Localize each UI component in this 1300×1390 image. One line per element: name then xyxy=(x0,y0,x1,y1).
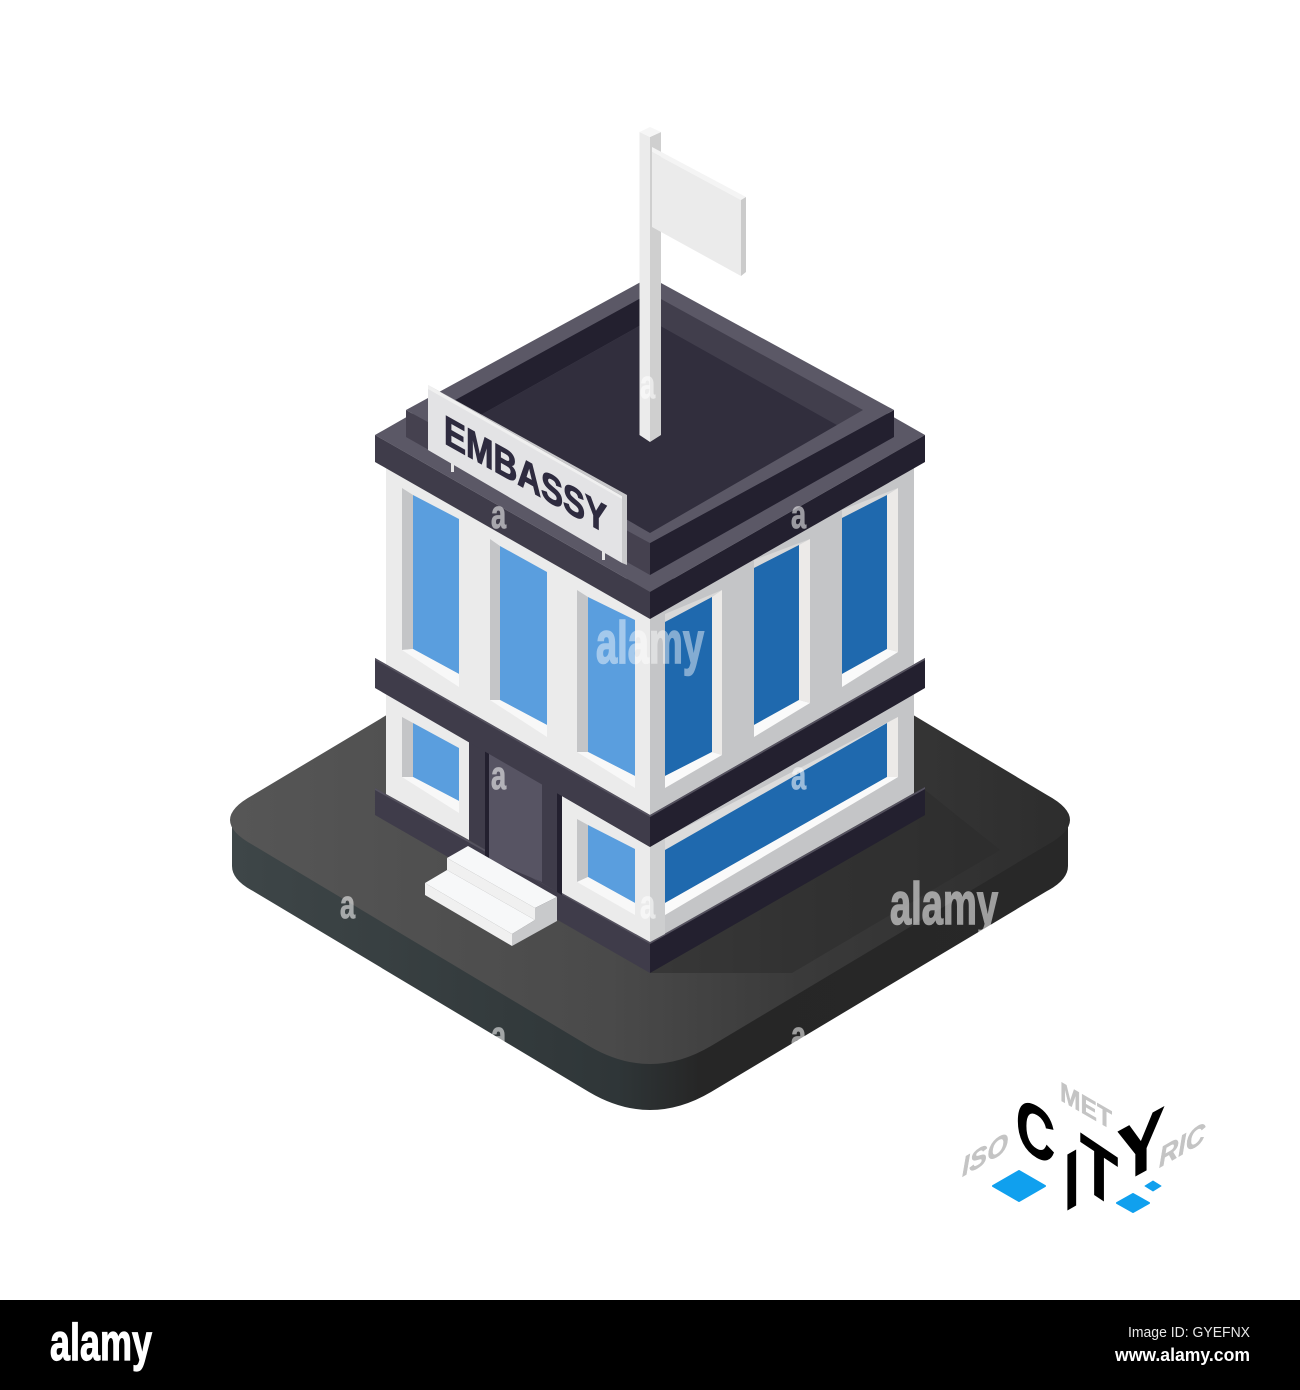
watermarks xyxy=(340,363,998,1058)
first floor left wall xyxy=(386,440,650,820)
logo: CITY xyxy=(1016,1081,1165,1230)
isometric city logo xyxy=(962,1077,1206,1230)
watermark: small a marks: a xyxy=(340,883,356,927)
footer image id: Image ID: GYEFNX xyxy=(1128,1324,1250,1341)
watermark: small a marks: a xyxy=(791,493,807,537)
watermark: small a marks: a xyxy=(640,883,656,927)
footer bar xyxy=(0,1300,1300,1390)
watermark: small a marks: a xyxy=(491,493,507,537)
sign text: EMBASSY xyxy=(444,407,607,544)
building shadow xyxy=(650,790,1000,973)
embassy building xyxy=(375,127,925,973)
flag pole xyxy=(640,127,661,442)
watermark: centre alamy: alamy xyxy=(596,610,704,676)
logo: blue tiles xyxy=(993,1171,1161,1212)
upper roof block xyxy=(406,277,894,575)
watermark: platform alamy: alamy xyxy=(890,871,998,937)
ground floor right wall and long window xyxy=(650,694,914,942)
windows right side xyxy=(665,488,898,788)
logo: CITY: Y xyxy=(1117,1090,1165,1203)
ground floor left wall and window xyxy=(386,694,469,840)
platform top xyxy=(230,576,1070,1064)
logo: ISO: ISO xyxy=(962,1127,1008,1183)
windows left side xyxy=(402,488,635,788)
middle floor band xyxy=(375,658,925,847)
watermark: small a marks: a xyxy=(491,1014,507,1058)
platform side xyxy=(232,820,1068,1110)
logo: CITY: T xyxy=(1080,1118,1118,1228)
watermark: small a marks xyxy=(340,363,807,1058)
entrance steps xyxy=(425,846,557,946)
footer url: www.alamy.com xyxy=(1114,1345,1250,1365)
footer brand: alamy xyxy=(50,1314,152,1372)
logo: CITY: I xyxy=(1064,1132,1080,1230)
watermark: small a marks: a xyxy=(791,754,807,798)
logo: MET: MET xyxy=(1060,1077,1112,1137)
flag xyxy=(652,147,746,276)
entrance door xyxy=(469,742,562,895)
first floor right wall xyxy=(650,440,914,820)
plinth xyxy=(375,787,925,973)
logo: RIC: RIC xyxy=(1159,1117,1206,1174)
ground floor centre wall and window xyxy=(562,796,650,942)
roof eave slab xyxy=(375,278,925,619)
watermark: small a marks: a xyxy=(791,1014,807,1058)
watermark: small a marks: a xyxy=(491,754,507,798)
embassy sign xyxy=(428,385,627,565)
watermark: small a marks: a xyxy=(640,363,656,407)
logo: CITY: C xyxy=(1016,1081,1055,1183)
isometric platform base xyxy=(230,576,1070,1110)
